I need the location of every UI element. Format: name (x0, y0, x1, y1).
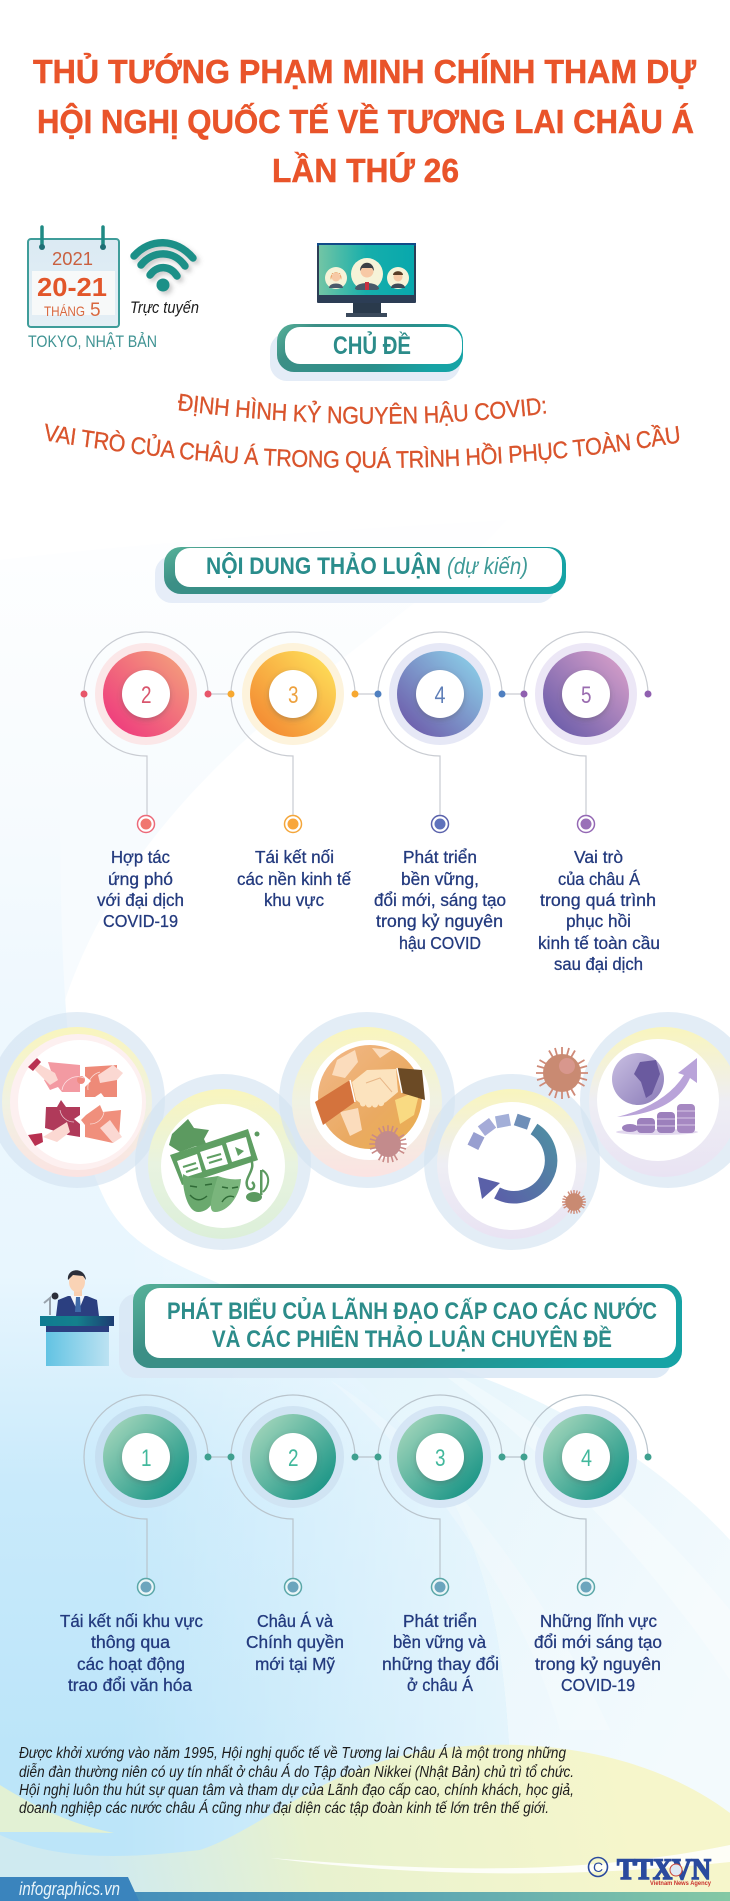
text: step 2 description: với đại dịch (97, 890, 184, 910)
title (33, 53, 697, 189)
text: step 2 description: ứng phó (108, 869, 173, 889)
text: lower step 2 description (246, 1611, 344, 1674)
text: step 4 description: trong kỷ nguyên (376, 911, 503, 931)
connectors between lower steps (208, 1456, 524, 1458)
panel: leaders' statements heading (119, 1284, 682, 1378)
text: lower step 1 description: Tái kết nối khu vực (60, 1611, 203, 1631)
text: background paragraph: Hội nghị luôn thu hút sự quan tâm và tham dự của Lãnh đạo cấp cao, chính khách, học giả, (19, 1782, 574, 1799)
icon: small virus right (562, 1190, 586, 1214)
text: lower step 3 description: bền vững và (393, 1632, 486, 1652)
text: lower step 4 description: đổi mới sáng tạo (534, 1632, 662, 1652)
step 2: 2 (141, 682, 152, 709)
text: background paragraph (19, 1745, 574, 1817)
illustration: globe and coins growth (580, 1012, 730, 1188)
text: lower step 3 description: những thay đổi (382, 1654, 499, 1674)
illustration: handshake over globe (279, 1012, 455, 1188)
calendar icon: 2021, 20-21 tháng 5: 20-21 (37, 272, 107, 302)
subtitle: curved theme text: VAI TRÒ CỦA CHÂU Á TRONG QUÁ TRÌNH HỒI PHỤC TOÀN CẦU (45, 424, 680, 473)
text: lower step 1 description: thông qua (91, 1632, 170, 1652)
panel: nội dung thảo luận heading: NỘI DUNG THẢO LUẬN (206, 551, 441, 580)
step 3 lower (374, 1395, 506, 1596)
label: location: TOKYO, NHẬT BẢN (28, 332, 157, 351)
title: LẦN THỨ 26 (272, 152, 459, 189)
text: lower step 3 description (382, 1611, 499, 1695)
text: step 4 description: bền vững, (401, 869, 479, 889)
text: lower step 4 description: trong kỷ nguyên (535, 1654, 661, 1674)
panel: nội dung thảo luận heading: (dự kiến) (447, 553, 528, 579)
step 1 lower: 1 (141, 1445, 152, 1472)
text: lower step 2 description: Châu Á và (257, 1611, 333, 1631)
calendar icon: 2021, 20-21 tháng 5 (28, 227, 119, 327)
text: lower step 4 description (534, 1611, 662, 1695)
icon: video conference monitor (317, 243, 416, 317)
text: step 5 description: Vai trò (574, 847, 623, 867)
text: step 3 description: các nền kinh tế (237, 869, 351, 889)
logo: TTXVN: Vietnam News Agency (650, 1881, 712, 1887)
text: lower step 3 description: ở châu Á (407, 1675, 473, 1695)
text: lower step 4 description: COVID-19 (561, 1675, 635, 1695)
panel: chủ đề (270, 324, 463, 381)
step 2 (80, 632, 212, 832)
text: lower step 3 description: Phát triển (403, 1611, 477, 1631)
step 4 (374, 632, 506, 832)
text: step 5 description: kinh tế toàn cầu (538, 933, 660, 953)
text: step 5 description: trong quá trình (540, 890, 656, 910)
icon: wifi (134, 243, 193, 292)
footer strip: infographics.vn (19, 1879, 120, 1899)
logo: TTXVN: C (593, 1859, 603, 1875)
step 4 lower: 4 (581, 1445, 592, 1472)
step 3: 3 (288, 682, 298, 709)
icon: large virus (536, 1047, 588, 1099)
text: background paragraph: doanh nghiệp các nước châu Á cũng như đại diện các tập đoàn kinh tế lớn trên thế giới. (19, 1800, 549, 1817)
step 1 lower (84, 1395, 212, 1596)
text: lower step 4 description: Những lĩnh vực (540, 1611, 657, 1631)
text: background paragraph: diễn đàn thường niên có uy tín nhất ở châu Á do Tập đoàn Nikkei (Nhật Bản) chủ trì tổ chức. (19, 1764, 574, 1781)
subtitle: curved theme text (45, 394, 680, 473)
subtitle: curved theme text: ĐỊNH HÌNH KỶ NGUYÊN HẬU COVID: (178, 394, 546, 426)
text: step 3 description: khu vực (264, 890, 324, 910)
text: step 2 description: COVID-19 (103, 911, 178, 931)
text: background paragraph: Được khởi xướng vào năm 1995, Hội nghị quốc tế về Tương lai Châu Á là một trong những (19, 1745, 566, 1762)
text: lower step 1 description (60, 1611, 203, 1695)
panel: chủ đề: CHỦ ĐỀ (333, 330, 411, 360)
text: step 4 description: Phát triển (403, 847, 477, 867)
calendar icon: 2021, 20-21 tháng 5: THÁNG (44, 303, 85, 319)
icon: virus on globe (369, 1125, 407, 1163)
text: step 2 description (97, 847, 184, 931)
text: step 2 description: Hợp tác (111, 847, 170, 867)
title: HỘI NGHỊ QUỐC TẾ VỀ TƯƠNG LAI CHÂU Á (37, 102, 694, 140)
text: lower step 1 description: các hoạt động (77, 1654, 185, 1674)
illustration: puzzle hands (0, 1012, 165, 1188)
step 3 lower: 3 (435, 1445, 446, 1472)
panel: leaders' statements heading: VÀ CÁC PHIÊN THẢO LUẬN CHUYÊN ĐỀ (212, 1324, 612, 1353)
logo: TTXVN: TTXVN (617, 1853, 711, 1886)
text: step 5 description (538, 847, 660, 974)
text: step 4 description (374, 847, 506, 953)
text: step 3 description (237, 847, 351, 910)
label: trực tuyến: Trực tuyến (130, 298, 199, 317)
step 4: 4 (434, 682, 446, 709)
footer strip (0, 1877, 730, 1901)
text: step 4 description: hậu COVID (399, 933, 481, 953)
step 2 lower (228, 1395, 358, 1596)
step 5 (520, 632, 652, 832)
logo: TTXVN (588, 1853, 712, 1887)
text: step 5 description: phục hồi (566, 911, 631, 931)
step 3 (228, 632, 358, 832)
calendar icon: 2021, 20-21 tháng 5: 2021 (52, 248, 93, 269)
step 5: 5 (581, 682, 592, 709)
illustration: recovery arrow (424, 1074, 600, 1250)
icon: speaker at podium (40, 1270, 114, 1366)
illustration: culture masks and film (135, 1074, 311, 1250)
text: step 4 description: đổi mới, sáng tạo (374, 890, 506, 910)
panel: leaders' statements heading: PHÁT BIỂU CỦA LÃNH ĐẠO CẤP CAO CÁC NƯỚC (167, 1296, 657, 1325)
text: step 5 description: của châu Á (558, 869, 640, 889)
connectors between upper steps (208, 693, 524, 695)
panel: nội dung thảo luận heading (155, 547, 566, 603)
text: step 3 description: Tái kết nối (255, 847, 334, 867)
text: lower step 1 description: trao đổi văn hóa (68, 1675, 192, 1695)
step 4 lower (520, 1395, 652, 1596)
text: step 5 description: sau đại dịch (554, 954, 643, 974)
calendar icon: 2021, 20-21 tháng 5: 5 (90, 300, 101, 321)
step 2 lower: 2 (288, 1445, 298, 1472)
text: lower step 2 description: Chính quyền (246, 1632, 344, 1652)
text: lower step 2 description: mới tại Mỹ (255, 1654, 335, 1674)
title: THỦ TƯỚNG PHẠM MINH CHÍNH THAM DỰ (33, 53, 697, 90)
